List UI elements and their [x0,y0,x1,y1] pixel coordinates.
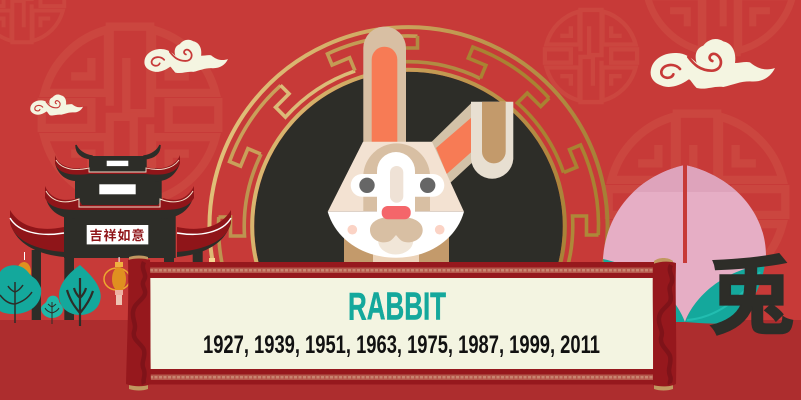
tree small [41,296,63,324]
head [328,142,464,212]
cloud: large right [651,39,775,89]
body [344,230,449,264]
lantern: centre [104,257,130,305]
zodiac character: 兎 [708,249,794,346]
background medallions [0,0,795,290]
nose [382,206,411,219]
peach leaf highlight [687,272,760,320]
middle roof [45,186,194,219]
white face centre [377,152,415,212]
gate [10,145,231,320]
cloud: upper left [144,40,228,73]
left ear [363,27,406,142]
chin [378,228,413,254]
tree right [59,265,101,326]
lower face [328,212,464,258]
cheeks [348,225,445,234]
muzzle [370,217,423,242]
scroll banner [126,256,676,390]
floor [0,320,801,400]
pillars [32,250,203,320]
title: RABBIT [348,286,446,328]
peach body [603,165,766,322]
tree left [0,265,41,323]
right leaf [685,264,765,324]
golden ring with dark disc [202,19,615,307]
lantern: left [17,252,31,282]
top band [140,262,665,278]
bottom band pattern [150,374,653,380]
top horns [76,145,160,159]
face arch [363,143,430,211]
lantern: right [209,258,215,263]
trees [0,265,101,326]
right ear [431,102,513,184]
rabbit [328,27,513,264]
top band pattern [150,268,653,273]
peach with leaves [600,160,770,324]
left roller [126,256,151,390]
nose bridge [390,166,403,203]
cloud: small left [30,94,83,115]
parchment [150,278,653,369]
lower roof right [177,210,231,257]
left leaf [603,259,685,322]
lower roof left [10,210,64,257]
middle sign [99,184,136,194]
peach top shade [634,166,738,192]
peach centre line [683,165,687,263]
right roller [653,258,676,390]
lanterns [17,252,215,305]
bottom band [140,369,665,384]
eyes [351,174,444,197]
gate body [64,156,176,258]
top sign [107,161,128,166]
years: 1927, 1939, 1951, 1963, 1975, 1987, 1999, 2011 [203,331,600,359]
main sign: 吉祥如意 [89,228,146,243]
top roof [55,155,180,181]
